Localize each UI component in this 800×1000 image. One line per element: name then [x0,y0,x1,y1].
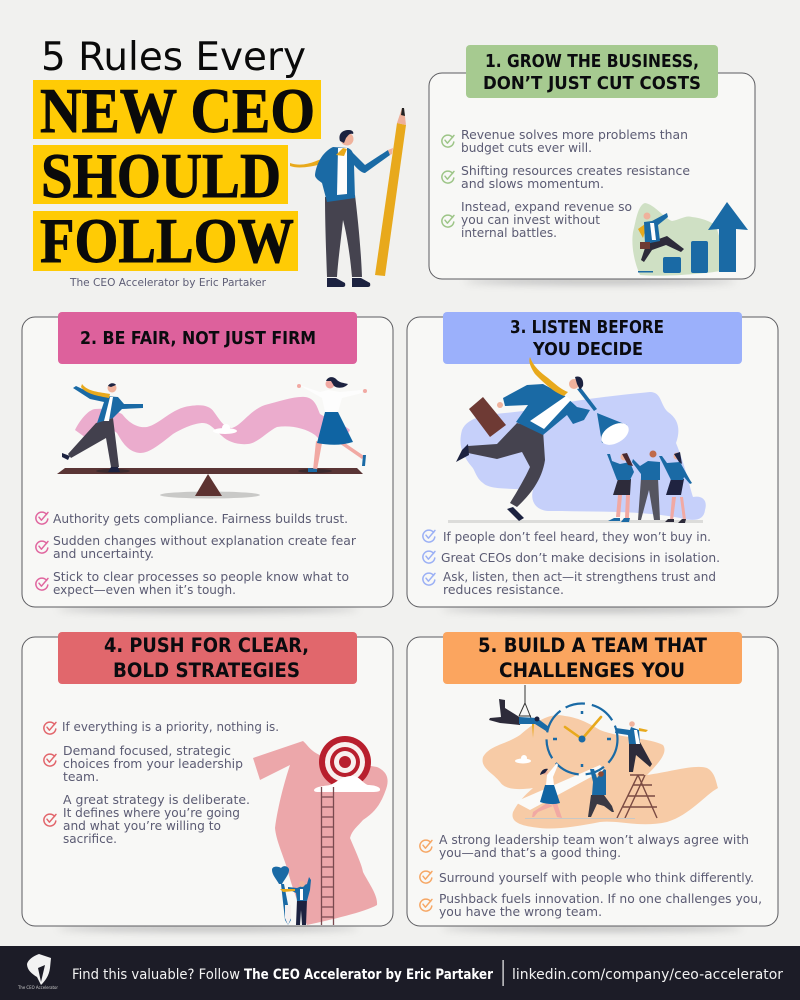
footer call to action: Find this valuable? Follow [72,967,240,983]
bullet list 4: choices from your leadership [63,757,243,771]
header 3 [443,312,742,364]
title line: 5 Rules Every: 5 Rules Every [41,35,306,80]
title block [33,35,321,289]
highlight bar: SHOULD: SHOULD [41,140,281,211]
bullet list 2: Sudden changes without explanation create fear [53,534,357,548]
header 1: 1. GROW THE BUSINESS, [485,52,699,72]
bullet list 1: Instead, expand revenue so [461,200,632,214]
footer bar [0,946,800,1000]
bullet list 1: you can invest without [461,213,600,227]
illustration: megaphone leader and team [448,357,706,523]
illustration: team and clock [483,685,718,829]
panel 4: clear bold strategies [22,632,393,926]
bullet list 4: team. [63,770,99,784]
header 4 [58,632,357,684]
bullet list 3 [423,530,720,597]
bullet list 1: internal battles. [461,226,557,240]
bullet list 5: you have the wrong team. [439,905,602,919]
bullet list 5: A strong leadership team won’t always agree with [439,833,749,847]
header 5: CHALLENGES YOU [499,659,685,682]
bullet list 2: Stick to clear processes so people know what to [53,570,349,584]
panel shadows [58,278,742,931]
header 3: YOU DECIDE [532,340,643,360]
highlight bar: NEW CEO: NEW CEO [40,75,315,146]
bullet list 3: Ask, listen, then act—it strengthens trust and [443,570,716,584]
illustration: CEO with pencil [290,108,406,287]
header 5: 5. BUILD A TEAM THAT [478,634,707,657]
bullet list 4: sacrifice. [63,832,117,846]
bullet list 5 [420,833,762,919]
small team figures [607,450,692,523]
bullet list 4: A great strategy is deliberate. [63,793,250,807]
header 4: BOLD STRATEGIES [113,659,300,682]
bullet list 1: budget cuts ever will. [461,141,592,155]
bullet list 4 [44,720,279,846]
bullet list 3: reduces resistance. [443,583,564,597]
header 2: 2. BE FAIR, NOT JUST FIRM [80,329,316,349]
highlight bar: FOLLOW: FOLLOW [40,205,294,276]
footer logo [17,954,58,990]
panel 2: be fair [22,312,393,607]
bullet list 3: Great CEOs don’t make decisions in isolation. [441,551,720,565]
illustration: target and ladder [253,736,388,925]
header 4: 4. PUSH FOR CLEAR, [104,634,309,657]
bullet list 4: It defines where you’re going [63,806,240,820]
footer url: linkedin.com/company/ceo-accelerator [512,967,783,983]
footer brand name: The CEO Accelerator by Eric Partaker [244,967,493,983]
bullet list 1: Shifting resources creates resistance [461,164,690,178]
footer divider [502,960,504,986]
bullet list 4: and what you’re willing to [63,819,221,833]
footer logo: The CEO Accelerator [17,985,58,990]
bullet list 3: If people don’t feel heard, they won’t buy in. [443,530,711,544]
bullet list 4: If everything is a priority, nothing is. [62,720,279,734]
bullet list 2: and uncertainty. [53,547,154,561]
bullet list 1: Revenue solves more problems than [461,128,688,142]
bullet list 5: Pushback fuels innovation. If no one challenges you, [439,892,762,906]
illustration: seesaw balance [57,377,367,498]
header 3: 3. LISTEN BEFORE [510,318,664,338]
bullet list 2: Authority gets compliance. Fairness builds trust. [53,512,348,526]
bullet list 4: Demand focused, strategic [63,744,231,758]
illustration: climbing growth bars [632,202,748,276]
panel 5: build a team that challenges you [407,632,778,926]
bullet list 2 [36,512,357,597]
bullet list 5: you—and that’s a good thing. [439,846,621,860]
header 1: DON’T JUST CUT COSTS [483,74,701,94]
header 2 [58,312,357,364]
bullet list 2: expect—even when it’s tough. [53,583,236,597]
bullet list 1 [442,128,690,240]
bullet list 5: Surround yourself with people who think differently. [439,871,754,885]
subtitle: The CEO Accelerator by Eric Partaker [69,277,267,289]
panel 3: listen before you decide [407,312,778,607]
header 5 [443,632,742,684]
panel 1: grow the business [429,45,755,279]
header 1 [466,45,718,98]
bullet list 1: and slows momentum. [461,177,604,191]
